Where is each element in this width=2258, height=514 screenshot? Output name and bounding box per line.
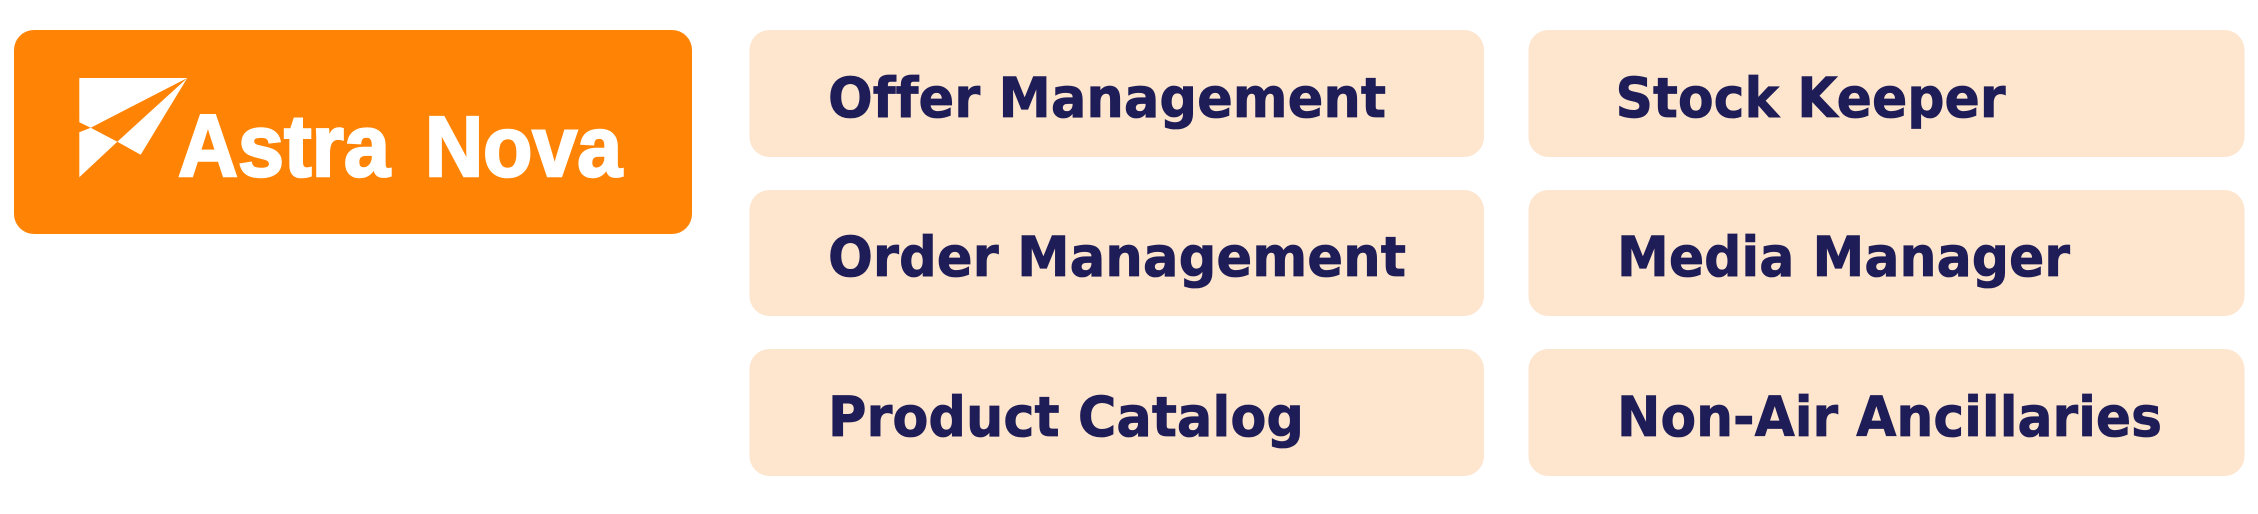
panel: Non-Air Ancillaries <box>1528 349 2244 476</box>
panel: Product Catalog: Product Catalog <box>828 385 1304 449</box>
panel: Media Manager <box>1528 190 2244 316</box>
panel: Non-Air Ancillaries: Non-Air Ancillaries <box>1617 385 2162 449</box>
heading: brand name: Astra <box>178 96 391 195</box>
heading: brand name <box>178 96 623 195</box>
panel: Offer Management: Offer Management <box>828 66 1386 130</box>
panel: Stock Keeper <box>1528 30 2244 157</box>
panel: Product Catalog <box>750 349 1484 476</box>
panel: Astra Nova brand card <box>14 30 692 234</box>
panel: Offer Management <box>750 30 1484 157</box>
icon: paper plane logo <box>79 78 187 177</box>
panel: Stock Keeper: Stock Keeper <box>1616 66 2006 130</box>
panel: Order Management: Order Management <box>828 225 1406 289</box>
panel: Order Management <box>750 190 1484 316</box>
panel: Media Manager: Media Manager <box>1617 225 2070 289</box>
heading: brand name: Nova <box>425 100 623 195</box>
